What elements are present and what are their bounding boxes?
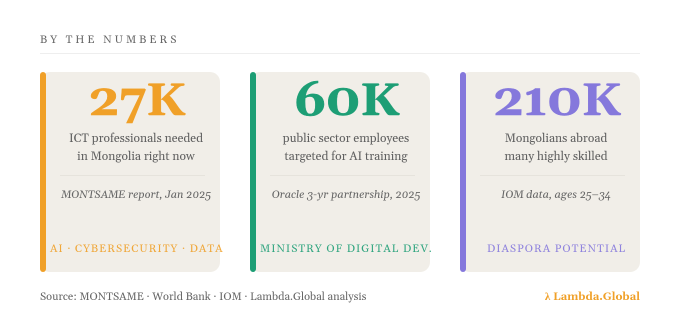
heading: by the numbers: BY THE NUMBERS <box>40 33 179 47</box>
source note: MONTSAME: MONTSAME report, Jan 2025 <box>61 188 211 202</box>
source note: IOM: IOM data, ages 25–34 <box>501 188 611 202</box>
accent bar: purple <box>460 72 466 272</box>
accent bar: green <box>250 72 256 272</box>
accent bar: orange <box>40 72 46 272</box>
description: ICT professionals: in Mongolia right now <box>77 150 195 165</box>
source note: Oracle: Oracle 3-yr partnership, 2025 <box>272 188 420 202</box>
description: public sector employees <box>282 132 409 165</box>
description: ICT professionals <box>69 132 203 165</box>
footer: brand: λ Lambda.Global <box>545 290 640 304</box>
stat: 60K: 60K <box>294 74 400 131</box>
description: Mongolians abroad: many highly skilled <box>504 150 608 165</box>
tag: diaspora potential: DIASPORA POTENTIAL <box>487 242 626 256</box>
stat: 210K: 210K <box>493 74 621 131</box>
panel: 210K Mongolians abroad <box>460 72 640 272</box>
description: ICT professionals: ICT professionals needed <box>69 132 203 147</box>
description: public sector employees: public sector employees <box>283 132 409 147</box>
tag: ministry of digital development: MINISTRY OF DIGITAL DEV. <box>260 242 433 256</box>
footer: source line: Source: MONTSAME · World Bank · IOM · Lambda.Global analysis <box>40 290 366 304</box>
panel: 60K public sector employees <box>250 72 430 272</box>
description: public sector employees: targeted for AI training <box>284 150 407 165</box>
description: Mongolians abroad <box>504 132 608 165</box>
stat: 27K: 27K <box>88 74 186 131</box>
panel: 27K ICT professionals <box>40 72 220 272</box>
description: Mongolians abroad: Mongolians abroad <box>505 132 607 147</box>
tag: AI cybersecurity data: AI · CYBERSECURITY · DATA <box>50 242 223 256</box>
